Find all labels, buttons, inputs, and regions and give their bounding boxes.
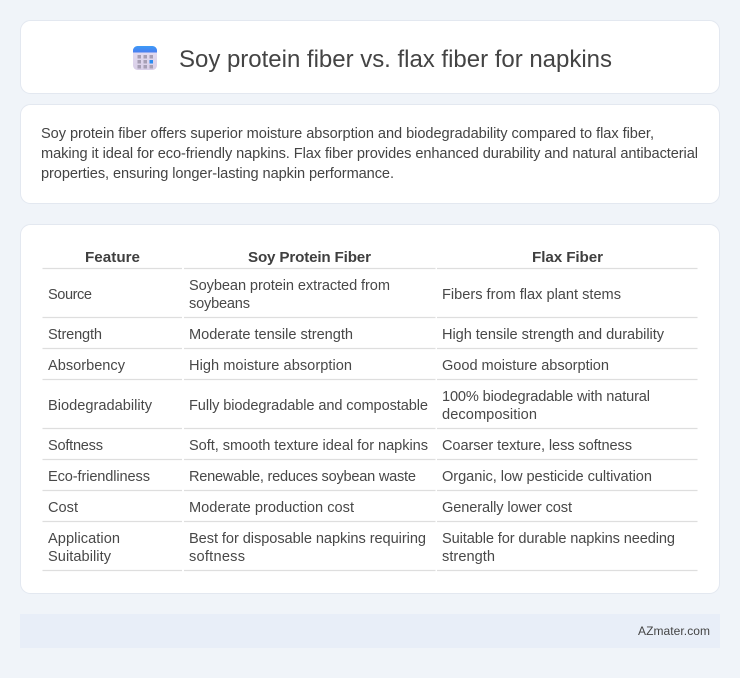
row: strength: Strength (48, 327, 102, 343)
row: softness: Coarser texture, less softness (442, 438, 632, 454)
icon: calendar (133, 46, 157, 70)
row: application suitability: Best for disposable napkins requiring (189, 531, 426, 547)
table header: Flax Fiber (532, 249, 603, 266)
panel: summary (20, 104, 720, 204)
table header: Soy Protein Fiber (248, 249, 371, 266)
row: eco-friendliness: Renewable, reduces soybean waste (189, 469, 416, 485)
row: absorbency: Absorbency (48, 358, 126, 374)
row: absorbency (48, 358, 609, 374)
row: strength: High tensile strength and durability (442, 327, 665, 343)
row: strength (48, 327, 665, 343)
table header: Feature (85, 249, 140, 266)
row: cost: Cost (48, 500, 78, 516)
row: source: soybeans (189, 296, 250, 312)
row: absorbency: High moisture absorption (189, 358, 352, 374)
row: softness (48, 438, 632, 454)
row: application suitability: softness (189, 549, 245, 565)
row: source: Fibers from flax plant stems (442, 287, 621, 303)
row: biodegradability (48, 389, 650, 423)
row: application suitability: Suitable for durable napkins needing (442, 531, 675, 547)
row: eco-friendliness: Organic, low pesticide cultivation (442, 469, 652, 485)
text block: summary paragraph: Soy protein fiber offers superior moisture absorption and biodegradability compared to flax fiber, (41, 126, 654, 142)
row: biodegradability: 100% biodegradable with natural (442, 389, 650, 405)
row: absorbency: Good moisture absorption (442, 358, 609, 374)
row: application suitability (48, 531, 675, 565)
row: application suitability: Suitability (48, 549, 112, 565)
row: biodegradability: decomposition (442, 407, 537, 423)
row: source (48, 278, 621, 312)
row: cost: Generally lower cost (442, 500, 572, 516)
row: source: Soybean protein extracted from (189, 278, 390, 294)
row: cost (48, 500, 572, 516)
row: softness: Softness (48, 438, 103, 454)
row: eco-friendliness: Eco-friendliness (48, 469, 150, 485)
row: application suitability: strength (442, 549, 495, 565)
text block: summary paragraph: properties, ensuring longer-lasting napkin performance. (41, 166, 394, 182)
text block: summary paragraph: making it ideal for eco-friendly napkins. Flax fiber provides enhanced durability and natural antibacterial (41, 146, 698, 162)
title: Soy protein fiber vs. flax fiber for napkins (179, 46, 612, 73)
row: biodegradability: Biodegradability (48, 398, 153, 414)
table header (85, 249, 603, 266)
row: strength: Moderate tensile strength (189, 327, 353, 343)
row: application suitability: Application (48, 531, 120, 547)
footer bar (20, 614, 720, 648)
row: softness: Soft, smooth texture ideal for napkins (189, 438, 428, 454)
footer credit: AZmater.com (638, 624, 710, 638)
row: cost: Moderate production cost (189, 500, 354, 516)
panel: title card (20, 20, 720, 94)
row: eco-friendliness (48, 469, 652, 485)
text block: summary paragraph (41, 126, 698, 182)
panel: comparison table (20, 224, 720, 594)
row: biodegradability: Fully biodegradable and compostable (189, 398, 428, 414)
row: source: Source (48, 287, 92, 303)
